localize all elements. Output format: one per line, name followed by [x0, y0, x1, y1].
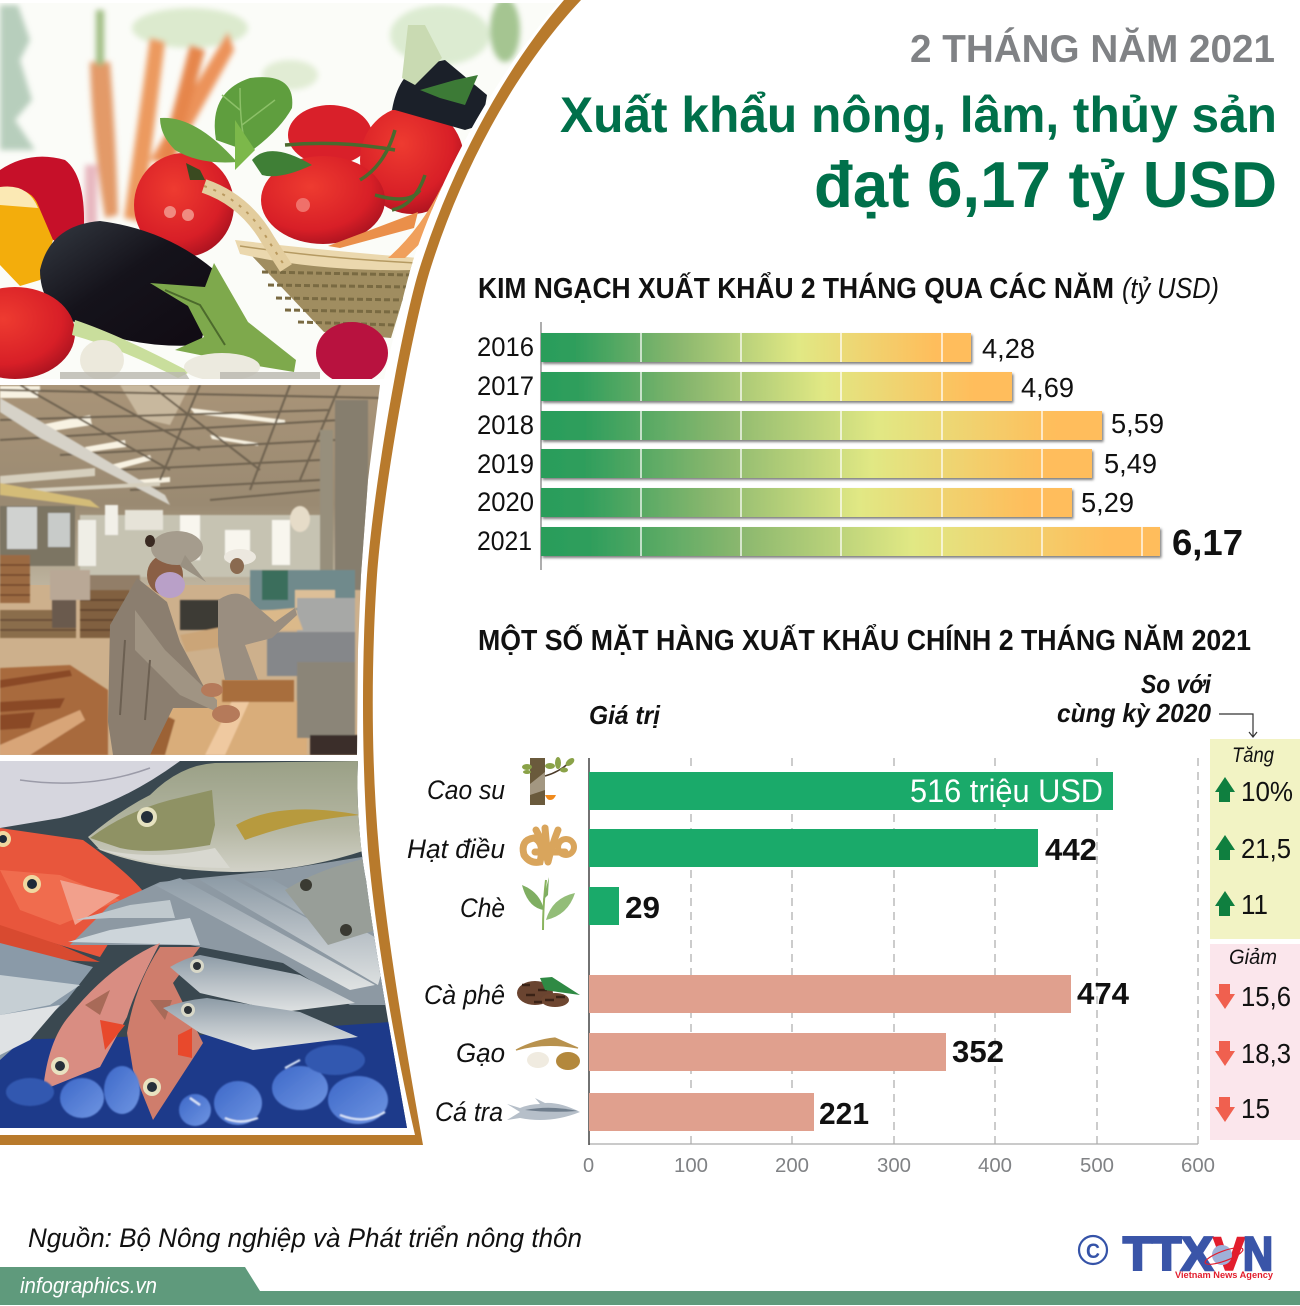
copyright mark: [1079, 1236, 1107, 1264]
bar: ca tra: [589, 1093, 869, 1131]
increase: cao su: 10%: [1241, 776, 1293, 807]
bar 2018: 5,59: [1111, 408, 1164, 439]
decrease: ca tra: 15: [1241, 1093, 1270, 1124]
bar: ca phe: 474: [1077, 976, 1130, 1011]
panel: increase: [1210, 739, 1300, 939]
bar 2016: [477, 332, 1035, 364]
icon: rubber tree: [522, 756, 576, 805]
axis tick labels: 100: [674, 1155, 708, 1177]
panel: decrease: Giảm: [1229, 946, 1277, 969]
heading: yearly export value: (tỷ USD): [1122, 273, 1219, 305]
product labels: Cao su: [427, 775, 505, 805]
increase: hat dieu: [1215, 833, 1291, 864]
bar: hat dieu: 442: [1045, 832, 1097, 867]
product labels: Hạt điều: [407, 834, 505, 864]
bar: ca phe: [589, 975, 1130, 1013]
bar 2020: 5,29: [1081, 487, 1134, 518]
curved brown frame: [0, 0, 581, 1145]
title: line two: đạt 6,17 tỷ USD: [814, 148, 1277, 221]
bar 2019: 2019: [477, 449, 534, 479]
decrease: ca phe: [1215, 981, 1291, 1012]
product labels: [407, 775, 505, 1127]
axis tick labels: 0: [583, 1155, 594, 1177]
bar: gao: [589, 1033, 1004, 1071]
bar chart: export value by year: [477, 322, 1243, 570]
photo: vegetables in a basket: [0, 0, 560, 384]
axis tick labels: [583, 1155, 1215, 1177]
axis tick labels: 300: [877, 1155, 911, 1177]
source note: Nguồn: Bộ Nông nghiệp và Phát triển nông thôn: [28, 1223, 582, 1253]
axis tick labels: 500: [1080, 1155, 1114, 1177]
icon: tea sprig: [522, 877, 575, 930]
product labels: Chè: [460, 893, 505, 923]
bar 2018: 2018: [477, 410, 534, 440]
logo: TTXVN: N: [1243, 1227, 1273, 1280]
bar: gao: 352: [952, 1034, 1004, 1069]
axis tick labels: 600: [1181, 1155, 1215, 1177]
bar 2017: [477, 371, 1074, 403]
bar 2019: 5,49: [1104, 448, 1157, 479]
arrow: to change column: [1219, 714, 1257, 737]
icon: coffee beans: [517, 977, 580, 1007]
increase: che: [1215, 889, 1268, 920]
increase: che: 11: [1241, 889, 1268, 920]
bar 2016: 4,28: [982, 333, 1035, 364]
decrease: gao: [1215, 1038, 1291, 1069]
product labels: Cá tra: [435, 1097, 503, 1127]
increase: cao su: [1215, 776, 1293, 807]
decrease: gao: 18,3: [1241, 1038, 1291, 1069]
bar 2021: 6,17: [1172, 522, 1243, 563]
title block: [560, 27, 1277, 221]
decrease: ca tra: [1215, 1093, 1270, 1124]
bar 2017: 4,69: [1021, 372, 1074, 403]
increase: hat dieu: 21,5: [1241, 833, 1291, 864]
heading: main export products: MỘT SỐ MẶT HÀNG XUẤT KHẨU CHÍNH 2 THÁNG NĂM 2021: [478, 623, 1251, 657]
title: line one: Xuất khẩu nông, lâm, thủy sản: [560, 87, 1277, 143]
bar 2020: 2020: [477, 487, 534, 517]
column label: value: Giá trị: [589, 700, 661, 730]
photo: wood factory worker: [0, 385, 400, 755]
panel: decrease: [1210, 944, 1300, 1140]
icon: pangasius fish: [507, 1098, 580, 1120]
bar 2016: 2016: [477, 332, 534, 362]
footer ribbon: infographics.vn: [20, 1273, 157, 1298]
bar 2019: [477, 448, 1157, 479]
axis tick labels: 400: [978, 1155, 1012, 1177]
column label: compared with 2020: cùng kỳ 2020: [1057, 698, 1212, 728]
icon: rice: [516, 1038, 580, 1070]
bar chart: main export products: [583, 758, 1215, 1177]
copyright mark: C: [1086, 1240, 1100, 1263]
bar: ca tra: 221: [819, 1096, 869, 1131]
bar 2018: [477, 408, 1164, 440]
product labels: Gạo: [456, 1038, 505, 1068]
bar 2017: 2017: [477, 371, 534, 401]
column label: compared with 2020: [1057, 669, 1212, 728]
title: period: 2 THÁNG NĂM 2021: [910, 27, 1275, 71]
bar 2021: [477, 522, 1243, 563]
product labels: Cà phê: [424, 980, 505, 1010]
logo: TTXVN: [1123, 1227, 1274, 1281]
bar: che: 29: [625, 890, 660, 925]
bar: che: [589, 887, 660, 925]
bar: hat dieu: [589, 829, 1097, 867]
bar 2020: [477, 487, 1134, 518]
icon: cashew nuts: [523, 828, 574, 862]
footer ribbon: [0, 1267, 1300, 1305]
logo: TTXVN: V: [1213, 1227, 1246, 1280]
bar: cao su: [589, 772, 1113, 810]
heading: yearly export value: KIM NGẠCH XUẤT KHẨU 2 THÁNG QUA CÁC NĂM: [478, 271, 1114, 305]
decrease: ca phe: 15,6: [1241, 981, 1291, 1012]
photo: fresh fish on ice: [0, 761, 420, 1129]
panel: increase: Tăng: [1232, 744, 1274, 767]
column label: compared with 2020: So với: [1141, 669, 1212, 699]
logo: TTXVN: Vietnam News Agency: [1175, 1270, 1274, 1281]
bar: cao su: 516 triệu USD: [910, 773, 1103, 809]
axis tick labels: 200: [775, 1155, 809, 1177]
logo: TTXVN: TTX: [1123, 1227, 1213, 1280]
bar 2021: 2021: [477, 526, 532, 556]
